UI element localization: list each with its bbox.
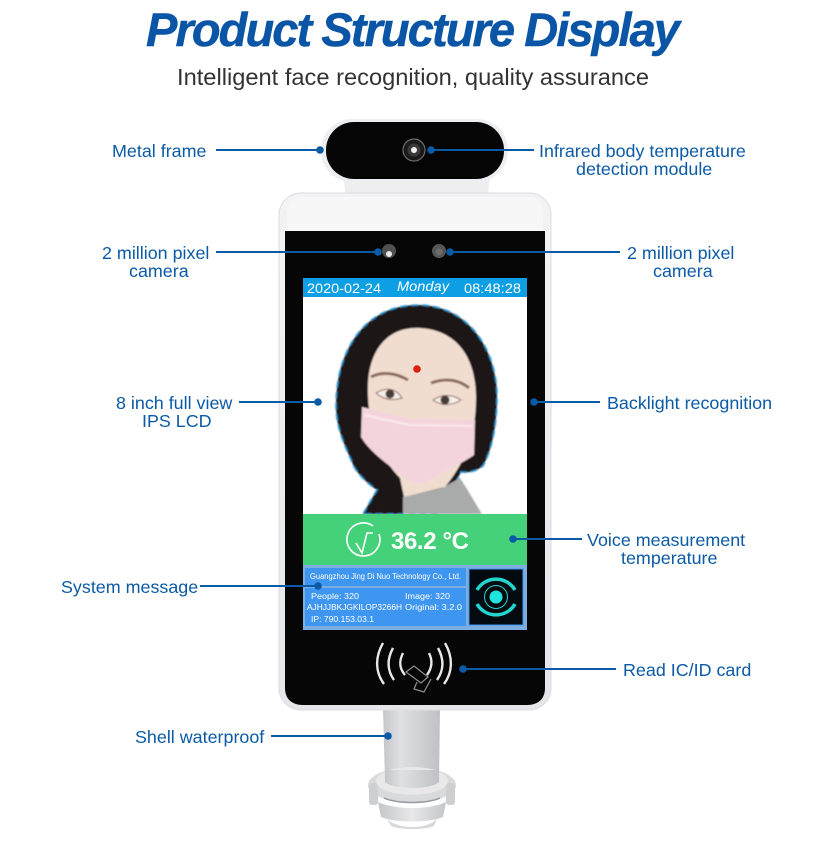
temperature bar <box>303 514 527 565</box>
screen <box>303 278 527 630</box>
status bar: 08:48:28 <box>464 281 521 296</box>
camera module neck <box>343 175 490 196</box>
status bar <box>303 278 527 297</box>
callout: right camera: 2 million pixel <box>627 243 734 263</box>
callout: infrared module: Infrared body temperature <box>539 141 746 161</box>
callout: right camera <box>446 243 734 281</box>
callout: voice measurement <box>509 530 745 568</box>
hair silhouette <box>336 305 497 514</box>
callout: left camera <box>102 243 382 281</box>
face photo <box>336 305 497 514</box>
system info panel: IP: 790.153.03.1 <box>311 615 375 624</box>
callout: shell waterproof <box>135 727 392 747</box>
callout: left camera: camera <box>129 261 189 281</box>
front cameras <box>382 244 446 258</box>
subtitle: Intelligent face recognition, quality assurance <box>177 64 649 90</box>
status bar: 2020-02-24 <box>307 281 382 296</box>
callout: backlight recognition: Backlight recognition <box>607 393 772 413</box>
system info panel <box>303 565 527 630</box>
sweater <box>403 478 482 514</box>
callout: read card <box>459 660 751 680</box>
temperature bar: 36.2 °C <box>391 528 469 555</box>
callout: backlight recognition <box>530 393 772 413</box>
infrared temperature module <box>321 119 508 182</box>
device illustration <box>279 119 551 829</box>
system info panel: Image: 320 <box>405 592 451 601</box>
stand pole and base <box>368 708 456 829</box>
title: Product Structure Display <box>146 3 683 56</box>
callout: metal frame <box>112 141 324 161</box>
system info panel: People: 320 <box>311 592 360 601</box>
callout: LCD <box>116 393 322 431</box>
face mask <box>361 407 475 483</box>
callout: infrared module: detection module <box>576 159 712 179</box>
callout: shell waterproof: Shell waterproof <box>135 727 264 747</box>
status bar: Monday <box>397 279 450 294</box>
system info panel: AJHJJBKJGKILOP3266H <box>307 603 402 612</box>
device top bezel <box>287 197 543 232</box>
system info panel: Guangzhou Jing Di Nuo Technology Co., Ltd. <box>310 572 461 581</box>
callout: read card: Read IC/ID card <box>623 660 751 680</box>
callout: right camera: camera <box>653 261 713 281</box>
device white frame <box>279 193 551 710</box>
black front panel <box>285 231 545 705</box>
callout: LCD: IPS LCD <box>142 411 212 431</box>
callout: voice measurement: Voice measurement <box>587 530 745 550</box>
callout: system message: System message <box>61 577 198 597</box>
forehead temperature dot <box>413 365 421 373</box>
callout: voice measurement: temperature <box>621 548 718 568</box>
callout: LCD: 8 inch full view <box>116 393 232 413</box>
recognition icon <box>469 569 523 625</box>
callout: left camera: 2 million pixel <box>102 243 209 263</box>
skin <box>368 328 476 497</box>
callout: infrared module <box>427 141 746 179</box>
eyebrows <box>371 373 408 380</box>
system info panel: Original: 3.2.0 <box>405 603 463 612</box>
eyes <box>376 389 402 400</box>
callout: system message <box>61 577 322 597</box>
callout: metal frame: Metal frame <box>112 141 207 161</box>
NFC card reader icon <box>377 643 451 692</box>
